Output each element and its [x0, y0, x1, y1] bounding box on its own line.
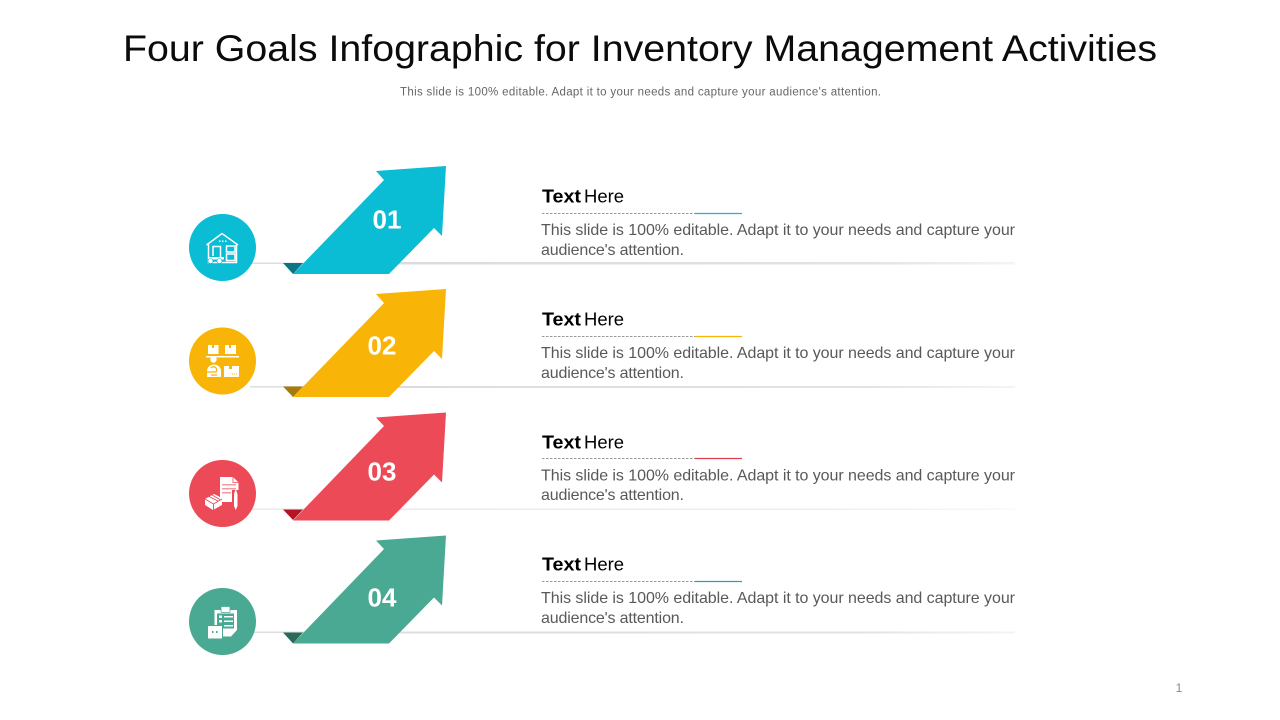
icon circle: boxes and worker [189, 328, 256, 394]
text block 4: Here [584, 554, 624, 574]
text block 2: audience's attention. [541, 365, 684, 382]
page number: 1 [1176, 681, 1183, 695]
arrow 04: 04 [368, 582, 397, 612]
title: Four Goals Infographic for Inventory Management Activities [123, 28, 1157, 69]
text block 3: audience's attention. [541, 487, 684, 504]
text block 1: Text [542, 186, 581, 206]
text block 4: Text [542, 554, 581, 574]
text block 2: Here [584, 310, 624, 330]
icon circle: warehouse [189, 214, 256, 281]
arrow 01 [283, 166, 446, 274]
text block 4: This slide is 100% editable. Adapt it to your needs and capture your [541, 590, 1016, 607]
text block 3: Text [542, 432, 581, 452]
text block 1 [541, 186, 1016, 259]
goal 1 row [189, 166, 1016, 281]
text block 4 [541, 554, 1016, 627]
text block 3: Here [584, 432, 624, 452]
text block 3 [541, 432, 1016, 504]
goal 2 row [189, 289, 1016, 397]
text block 1: Here [584, 186, 624, 206]
text block 4: audience's attention. [541, 610, 684, 627]
text block 2 [541, 310, 1016, 382]
icon circle: clipboard checklist [189, 588, 256, 655]
arrow 01: 01 [373, 204, 401, 234]
arrow 02: 02 [368, 330, 396, 360]
goal 4 row [189, 536, 1016, 655]
goal 3 row [189, 412, 1016, 527]
arrow 03: 03 [368, 456, 396, 486]
text block 3: This slide is 100% editable. Adapt it to your needs and capture your [541, 468, 1016, 484]
arrow 02 [283, 289, 446, 397]
subtitle: This slide is 100% editable. Adapt it to your needs and capture your audience's attention. [400, 86, 881, 98]
text block 2: Text [542, 310, 581, 330]
arrow 04 [283, 536, 446, 644]
icon circle: document and package [189, 460, 256, 527]
text block 1: audience's attention. [541, 242, 684, 259]
text block 1: This slide is 100% editable. Adapt it to your needs and capture your [541, 222, 1016, 239]
text block 2: This slide is 100% editable. Adapt it to your needs and capture your [541, 345, 1016, 362]
arrow 03 [283, 412, 446, 520]
